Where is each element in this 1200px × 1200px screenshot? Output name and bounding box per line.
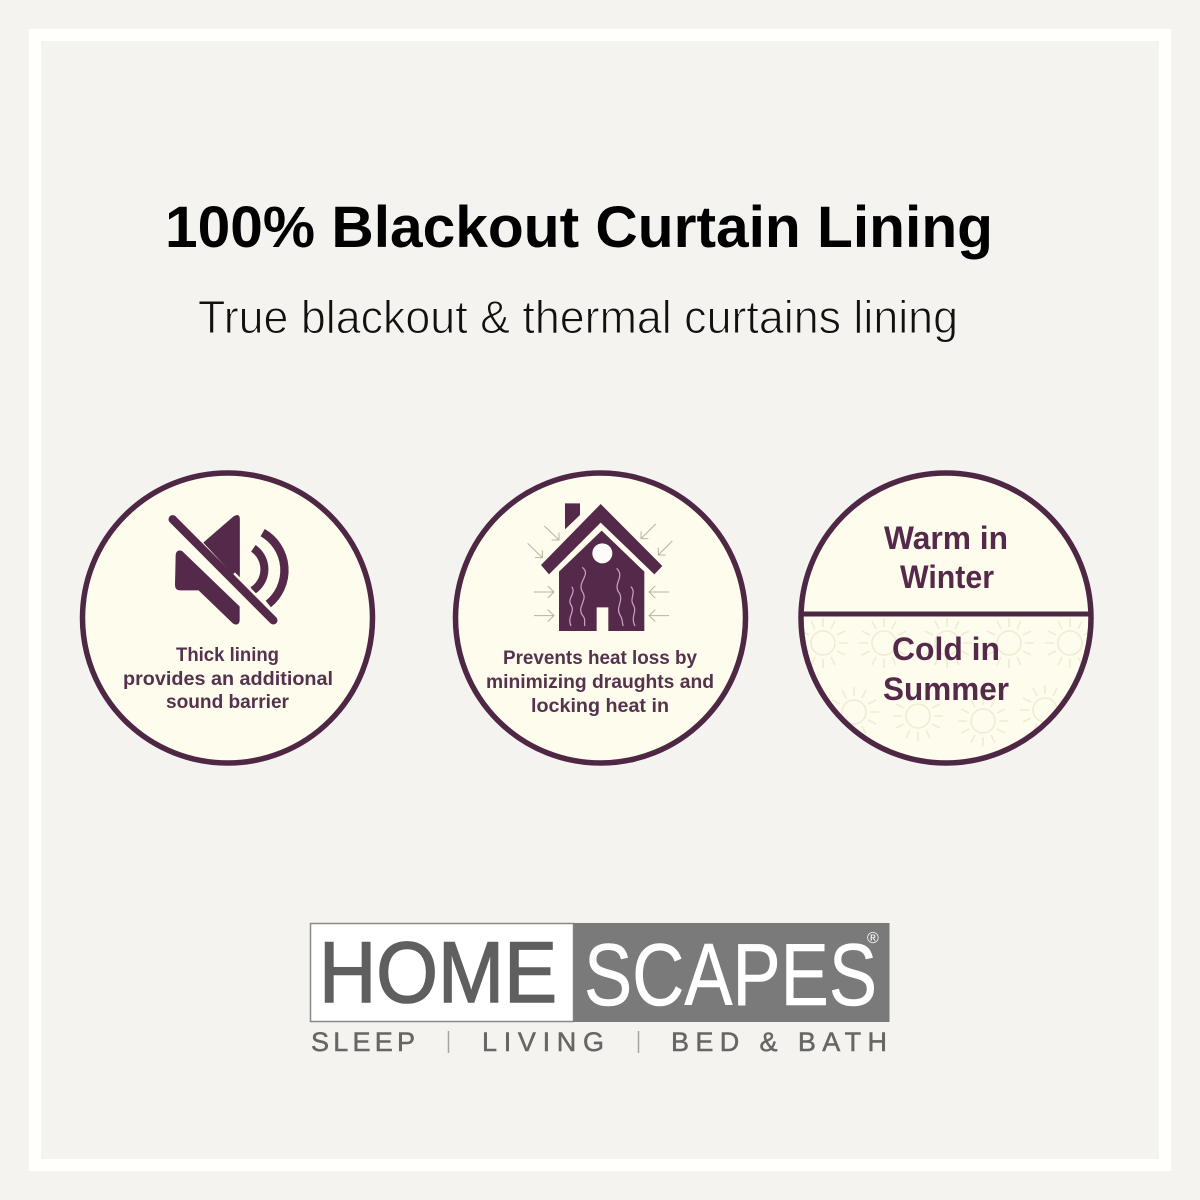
text: warm in winter xyxy=(884,520,1008,595)
logo tagline xyxy=(311,1027,887,1057)
icon: insulated house xyxy=(528,503,672,631)
text: cold in summer: Summer xyxy=(883,671,1009,707)
circle badge: heat loss xyxy=(456,473,746,763)
logo tagline: BED & BATH xyxy=(671,1027,887,1057)
icon: muted speaker xyxy=(173,515,284,624)
circle badge: seasons xyxy=(801,473,1091,763)
logo tagline: SLEEP xyxy=(311,1027,415,1057)
heat arrows xyxy=(528,524,672,622)
circle outline and divider xyxy=(801,473,1091,763)
subtitle: True blackout & thermal curtains lining xyxy=(198,291,958,343)
text: sound barrier description xyxy=(123,645,333,713)
registered mark: ® xyxy=(867,930,879,947)
text: heat loss description: minimizing draughts and xyxy=(486,672,714,693)
text: warm in winter: Winter xyxy=(900,559,994,595)
text: sound barrier description: provides an additional xyxy=(123,669,333,690)
panel: sound barrier xyxy=(82,473,372,763)
logo tagline: LIVING xyxy=(482,1027,604,1057)
text: sound barrier description: Thick lining xyxy=(176,645,279,666)
sun pattern xyxy=(798,618,1095,746)
text: cold in summer xyxy=(883,631,1009,707)
logo box grey half xyxy=(574,923,890,1022)
logo box white half xyxy=(310,924,574,1022)
text: cold in summer: Cold in xyxy=(892,631,1000,667)
panel: heat loss xyxy=(456,473,746,763)
title: 100% Blackout Curtain Lining xyxy=(165,195,993,260)
text: warm in winter: Warm in xyxy=(884,520,1008,556)
logo word: SCAPES: SCAPES xyxy=(584,925,877,1024)
text: sound barrier description: sound barrier xyxy=(166,692,290,713)
panel: warm in winter, cold in summer xyxy=(798,473,1095,763)
circle badge: sound barrier xyxy=(82,473,372,763)
text: heat loss description: Prevents heat loss by xyxy=(503,648,697,669)
text: heat loss description: locking heat in xyxy=(531,696,669,717)
text: heat loss description xyxy=(486,648,714,717)
logo word: HOME: HOME xyxy=(319,925,557,1021)
logo: Homescapes xyxy=(310,923,890,1057)
